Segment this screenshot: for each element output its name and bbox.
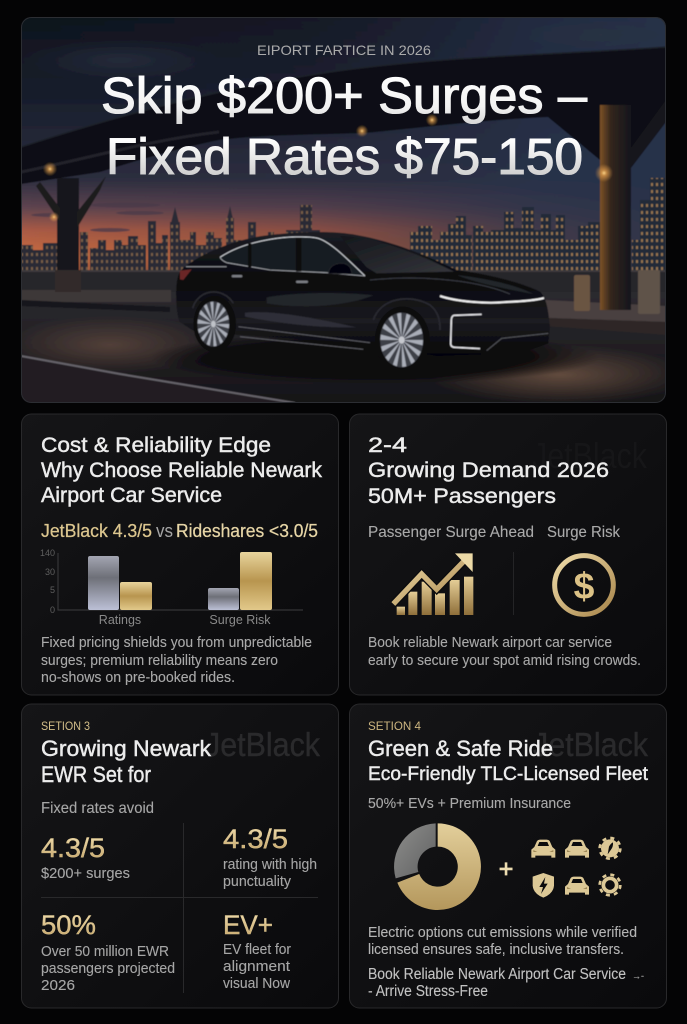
bar chart: Surge Risk xyxy=(209,613,271,627)
donut chart xyxy=(394,823,481,910)
heading xyxy=(41,434,322,507)
icon: gear xyxy=(600,875,620,895)
body text: Fixed pricing shields you from unpredictable xyxy=(41,634,312,651)
stat: 50%: 2026 xyxy=(41,977,75,994)
bar chart: 5 xyxy=(50,585,55,595)
heading: Growing Demand 2026 xyxy=(368,458,609,482)
rating comparison xyxy=(41,521,318,541)
heading: Airport Car Service xyxy=(41,484,222,507)
watermark: JetBlack xyxy=(533,726,648,763)
section tag: SETION 4 xyxy=(368,721,422,733)
icon: dollar coin xyxy=(555,556,613,614)
stat: 4.3/5 surges xyxy=(41,833,130,882)
heading: 50M+ Passengers xyxy=(368,484,556,508)
LED front light xyxy=(451,314,482,349)
bar chart: 30 xyxy=(45,567,55,577)
LED daytime light xyxy=(440,296,544,303)
stat: EV+ xyxy=(223,910,291,992)
panel: green and safe ride xyxy=(350,704,666,1008)
icon: car 3 xyxy=(565,877,589,895)
heading: Cost & Reliability Edge xyxy=(41,434,271,457)
stat: 4.3/5 rating: punctuality xyxy=(223,873,291,890)
sub heading: 50%+ EVs + Premium Insurance xyxy=(368,795,571,812)
body text: Book reliable Newark airport car service xyxy=(368,634,612,651)
curb xyxy=(22,378,276,402)
rating comparison: JetBlack 4.3/5 xyxy=(41,521,152,541)
intro line: Fixed rates avoid xyxy=(41,800,154,817)
car shadow xyxy=(165,336,590,380)
icon: shield bolt xyxy=(533,873,554,898)
icon: car 1 xyxy=(531,840,555,858)
sub labels: Passenger Surge Ahead xyxy=(368,524,534,541)
stat: 50%: Over 50 million EWR xyxy=(41,943,169,960)
sub labels xyxy=(368,524,621,541)
heading: EWR Set for xyxy=(41,762,151,787)
watermark: JetBlack xyxy=(532,435,648,476)
stat: 50%: 50% xyxy=(41,910,96,940)
panel: cost and reliability xyxy=(22,414,338,695)
city skyline right xyxy=(410,178,666,273)
rear wheel xyxy=(193,296,236,352)
hero scene: dusk city under bridge xyxy=(0,17,687,405)
bar chart: 140 xyxy=(40,548,55,558)
call to action: - Arrive Stress-Free xyxy=(368,983,488,1000)
bridge lamps xyxy=(43,162,57,176)
body text xyxy=(368,924,637,958)
body text: licensed ensures safe, inclusive transfers. xyxy=(368,941,624,958)
panel: section 3 stats xyxy=(22,704,338,1008)
hero title: Skip $200+ Surges – xyxy=(101,67,588,124)
plus sign: + xyxy=(499,855,513,883)
hero title xyxy=(101,67,588,185)
watermark: JetBlack xyxy=(205,726,320,763)
icon group: fleet and safety xyxy=(531,838,620,898)
rating comparison: Rideshares <3.0/5 xyxy=(176,521,318,541)
heading: Growing Newark xyxy=(41,736,212,761)
sub labels: Surge Risk xyxy=(547,524,621,541)
body text: Electric options cut emissions while verified xyxy=(368,924,637,941)
body text xyxy=(368,634,641,669)
stat: 50%: passengers projected xyxy=(41,960,175,977)
icon: leaf gear xyxy=(600,838,620,859)
section tag: SETION 3 xyxy=(41,721,90,733)
heading: Green & Safe Ride xyxy=(368,736,553,761)
front wheel xyxy=(375,307,430,373)
stat: EV+: EV fleet for xyxy=(223,941,291,958)
stat: 4.3/5 rating xyxy=(223,824,317,890)
bridge deck and pillars xyxy=(21,47,666,184)
rating comparison: vs xyxy=(156,521,173,541)
panel: hero xyxy=(0,17,687,405)
icon: rising chart with arrow xyxy=(393,553,473,615)
call to action: →- xyxy=(632,971,644,981)
heading: 2-4 xyxy=(368,433,407,457)
stat: EV+: visual Now xyxy=(223,975,290,992)
stat: 50% xyxy=(41,910,175,994)
heading xyxy=(368,433,609,508)
heading: Why Choose Reliable Newark xyxy=(41,459,322,482)
hero title: Fixed Rates $75-150 xyxy=(106,128,583,185)
call to action: Book Reliable Newark Airport Car Service xyxy=(368,966,626,983)
body text xyxy=(41,634,312,686)
ground and road xyxy=(21,292,666,403)
bar chart: Ratings xyxy=(99,613,141,627)
call to action xyxy=(368,966,644,1000)
heading xyxy=(368,736,649,785)
body text: early to secure your spot amid rising crowds. xyxy=(368,652,641,669)
heading xyxy=(41,736,212,787)
body text: no-shows on pre-booked rides. xyxy=(41,669,235,686)
heading: Eco-Friendly TLC-Licensed Fleet xyxy=(368,763,649,785)
stat: 4.3/5 surges: 4.3/5 xyxy=(41,833,105,863)
bar chart xyxy=(40,548,303,627)
city skyline left xyxy=(21,205,320,273)
icon: car 2 xyxy=(565,840,589,858)
black sedan xyxy=(176,232,550,373)
bar chart: 0 xyxy=(50,605,55,615)
stat: EV+: EV+ xyxy=(223,910,273,940)
side mirror xyxy=(328,263,352,274)
stat: 4.3/5 rating: rating with high xyxy=(223,856,317,873)
icon: dollar coin: $ xyxy=(574,565,595,607)
panel: growing demand xyxy=(350,414,666,695)
stat: 4.3/5 rating: 4.3/5 xyxy=(223,824,288,854)
stat: 4.3/5 surges: $200+ surges xyxy=(41,865,130,882)
stat: EV+: alignment xyxy=(223,958,291,975)
body text: surges; premium reliability means zero xyxy=(41,652,278,669)
hero kicker: EIPORT FARTICE IN 2026 xyxy=(257,42,431,58)
